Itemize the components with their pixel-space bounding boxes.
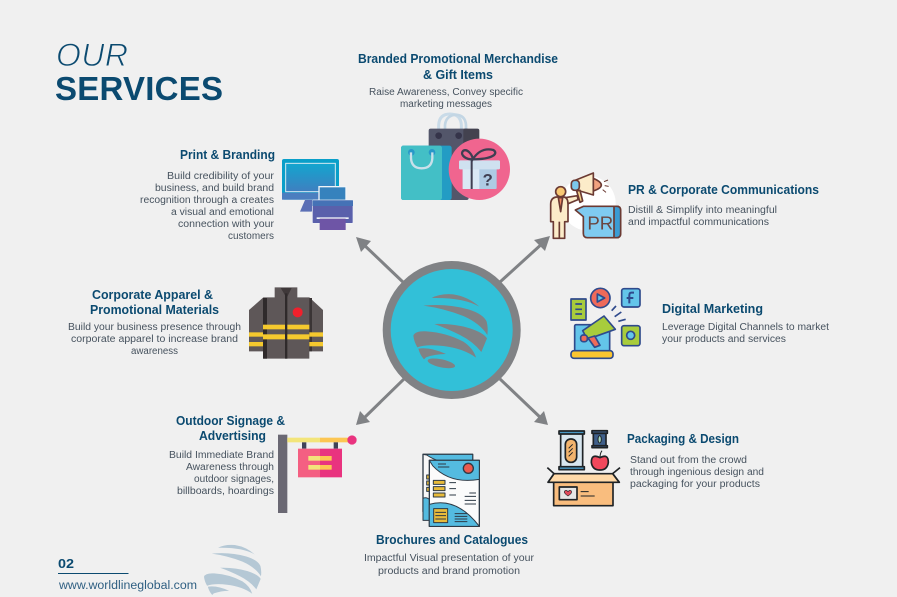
icon: PR man with megaphone [551, 173, 621, 238]
page number: 02 [58, 556, 74, 571]
heading: outdoor signage [176, 414, 285, 443]
heading: corporate apparel: Promotional Materials [90, 303, 219, 317]
icon: shopping bags and gift: ? [483, 171, 493, 190]
icon: shopping bags and gift [401, 114, 510, 200]
text: outdoor signage description: Awareness through [186, 462, 274, 473]
text: digital marketing description: your products and services [662, 334, 786, 345]
text: outdoor signage description [169, 450, 274, 497]
heading: PR: PR & Corporate Communications [628, 183, 819, 197]
panel: packaging and design [547, 431, 764, 506]
icon: brochure [423, 454, 479, 526]
heading: outdoor signage: Advertising [199, 429, 266, 443]
icon: hanging sign [278, 435, 357, 513]
title: OUR [56, 37, 128, 73]
text: packaging description: Stand out from the crowd [630, 455, 747, 466]
title: SERVICES [55, 70, 223, 107]
heading: outdoor signage: Outdoor Signage & [176, 414, 285, 428]
heading: branded merchandise: & Gift Items [423, 68, 493, 82]
text: print and branding description: customers [228, 231, 274, 242]
panel: PR and corporate communications [551, 173, 819, 238]
icon: packaging box [547, 431, 620, 506]
heading: corporate apparel: Corporate Apparel & [92, 288, 213, 302]
text: branded merchandise description: Raise Awareness, Convey specific [369, 87, 523, 98]
text: corporate apparel description [68, 322, 241, 357]
text: outdoor signage description: outdoor signages, [194, 474, 274, 485]
icon: computer and printer [282, 159, 353, 230]
text: outdoor signage description: billboards, hoardings [177, 486, 274, 497]
text: digital marketing description: Leverage Digital Channels to market [662, 322, 829, 333]
central globe logo [387, 265, 517, 395]
panel: outdoor signage [169, 414, 357, 513]
title [55, 37, 223, 107]
heading: packaging: Packaging & Design [627, 432, 739, 446]
heading: digital marketing: Digital Marketing [662, 302, 763, 316]
icon: PR man with megaphone: PR [587, 213, 613, 234]
text: PR description: and impactful communications [628, 217, 769, 228]
icon: digital marketing megaphone [571, 288, 640, 358]
text: print and branding description: connection with your [178, 219, 275, 230]
text: corporate apparel description: awareness [131, 346, 178, 357]
text: print and branding description [140, 171, 275, 242]
faded globe [204, 545, 261, 595]
panel: branded merchandise [358, 52, 558, 200]
heading: corporate apparel [90, 288, 219, 317]
text: brochures description: products and brand promotion [378, 566, 520, 577]
panel: print and branding [140, 148, 353, 242]
heading: branded merchandise: Branded Promotional Merchandise [358, 52, 558, 66]
text: packaging description: packaging for your products [630, 479, 760, 490]
text: corporate apparel description: Build your business presence through [68, 322, 241, 333]
panel: corporate apparel [68, 287, 323, 359]
text: outdoor signage description: Build Immediate Brand [169, 450, 274, 461]
website: www.worldlineglobal.com [58, 580, 197, 592]
text: corporate apparel description: corporate apparel to increase brand [71, 334, 238, 345]
text: PR description [628, 205, 777, 228]
footer [58, 545, 261, 595]
icon: jacket [249, 287, 323, 359]
text: print and branding description: business, and build brand [155, 183, 274, 194]
arrows [356, 236, 550, 425]
heading: branded merchandise [358, 52, 558, 82]
text: PR description: Distill & Simplify into meaningful [628, 205, 777, 216]
text: print and branding description: recognition through a creates [140, 195, 274, 206]
heading: print and branding: Print & Branding [180, 148, 275, 162]
heading: brochures: Brochures and Catalogues [376, 533, 528, 547]
text: brochures description: Impactful Visual presentation of your [364, 553, 535, 564]
text: packaging description [630, 455, 764, 490]
text: packaging description: through ingenious design and [630, 467, 764, 478]
text: brochures description [364, 553, 535, 577]
text: digital marketing description [662, 322, 829, 345]
text: branded merchandise description [369, 87, 523, 110]
text: print and branding description: Build credibility of your [167, 171, 275, 182]
text: print and branding description: a visual and emotional [171, 207, 274, 218]
panel: digital marketing [571, 288, 829, 358]
panel: brochures and catalogues [364, 454, 535, 577]
text: branded merchandise description: marketing messages [400, 99, 492, 110]
